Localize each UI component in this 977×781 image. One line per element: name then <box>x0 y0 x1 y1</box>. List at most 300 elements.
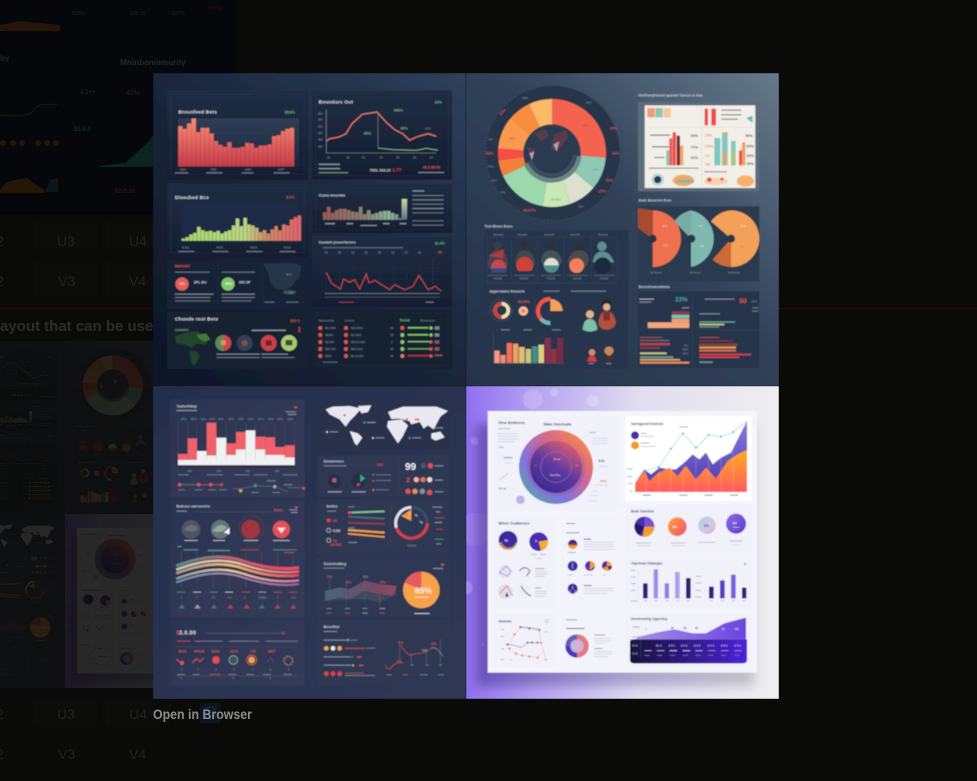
panel: lines and donut: % <box>415 514 419 518</box>
panel: wave chart: 0.0 <box>292 595 296 599</box>
panel: concentric chart: Scheling <box>504 458 513 460</box>
panel: map and circles: $00 0 <box>290 319 299 323</box>
panel: red line chart: 00 <box>418 250 422 254</box>
panel: three pies: 00 Hours <box>650 270 662 274</box>
dimmed background: upper dashboards: $99% <box>208 6 221 12</box>
ring chart: 15% <box>499 108 507 116</box>
panel: bar chart red: 1987 <box>278 168 285 172</box>
dimmed background: table rows bottom <box>0 700 170 762</box>
panel: lines and donut: 0.00 <box>333 529 340 533</box>
panel: map and circles <box>167 312 308 369</box>
panel: purple area: Deerlinoding Ogorning <box>631 617 667 621</box>
panel: benefits <box>317 620 450 685</box>
panel: three pies: 00 Hours <box>689 270 701 274</box>
panel: four circles: 48% <box>672 526 678 529</box>
ring chart: 18% <box>586 101 592 105</box>
panel: score tiles: 2 <box>406 477 410 484</box>
panel: communication bars: 00% <box>683 347 689 351</box>
panel: concentric chart: $.fs <box>599 459 605 463</box>
panel: light report: 30% <box>691 134 699 138</box>
panel: people and small charts: FOUR <box>547 277 555 281</box>
panel: green red bars: $ 621 <box>284 245 292 249</box>
panel: legend table: $5.10.000 <box>351 354 364 358</box>
panel: line chart: Boundars Out <box>319 99 353 105</box>
panel: line chart: 1.77 <box>392 168 402 173</box>
dimmed background: table rows top: V4 <box>129 273 146 289</box>
panel: lines and donut: 00 <box>333 519 337 523</box>
panel: people and small charts: Amount <box>518 232 528 236</box>
panel: bar chart red: 1985 <box>210 168 217 172</box>
panel: red line chart: 11.4% <box>435 242 446 246</box>
panel: legend icons <box>560 517 619 608</box>
ring chart: 23% <box>610 127 618 131</box>
panel: three pies <box>638 199 759 281</box>
panel: line chart: 40% <box>400 127 408 131</box>
panel: light report: C5% <box>705 145 714 149</box>
quadrant: slate dashboard <box>153 386 466 699</box>
panel: three pies: 40% <box>662 224 668 228</box>
panel: green red bars: $ 821 <box>216 245 224 249</box>
panel: three pies: 0% <box>699 224 703 228</box>
ring chart: 83% <box>486 151 494 155</box>
panel: communication bars: 00% <box>683 351 689 355</box>
panel: line chart: 00 <box>396 155 400 159</box>
panel: lines and donut: 000000 <box>407 543 417 547</box>
panel: line chart: 00 <box>380 155 383 159</box>
panel: stacked bars: 00% <box>191 417 197 421</box>
panel: score tiles: 99 <box>405 462 417 473</box>
panel: communication bars: 0% <box>684 344 689 348</box>
panel: legend table <box>312 310 452 369</box>
panel: legend table: Trend <box>400 318 410 322</box>
panel: network chart: Gadosts <box>498 620 512 624</box>
ring chart: 0% <box>489 137 493 141</box>
panel: world map <box>317 399 450 449</box>
dimmed heading: ayout that can be used <box>0 318 163 335</box>
panel: purple area: £1.1 <box>656 644 662 648</box>
panel: stacked bars: 00% <box>258 417 264 421</box>
panel: legend table: $00,1500 <box>351 326 363 330</box>
quadrant: dark red and green dashboard <box>153 73 466 386</box>
panel: benefits: 00 <box>410 663 414 667</box>
panel: wave and pie: 0% <box>380 580 386 584</box>
panel: benefits: Beneffon <box>324 625 340 629</box>
panel: wave and pie: Seandvalling <box>324 562 346 566</box>
ring chart: 80% <box>523 96 529 100</box>
panel: line chart: 000 <box>318 131 323 135</box>
panel: stacked bars: 00% <box>201 417 207 421</box>
ring chart: 88.07% <box>523 209 536 213</box>
panel: benefits: 7% <box>398 641 404 645</box>
panel: status circles and map: 0% <box>180 282 186 286</box>
panel: light report: GolOverjhound quantel Sonon & Abs <box>638 93 703 97</box>
panel: area chart: Springnost Eraricies <box>631 422 664 426</box>
panel: stacked bars: 00% <box>181 417 187 421</box>
panel: wave and pie: 0% <box>346 580 352 584</box>
panel: stacked bars: 000 <box>275 469 280 473</box>
panel: wave chart: 0.0 <box>228 595 232 599</box>
panel: legend table: 0 <box>391 340 393 344</box>
panel: purple area: 00 <box>671 628 674 630</box>
panel: donut summary <box>560 614 619 667</box>
panel: line chart <box>312 90 452 180</box>
panel: concentric chart: Serval <box>553 458 560 461</box>
panel: purple area: £ 5 1 <box>734 644 741 648</box>
panel: people and small charts: Amount <box>493 232 503 236</box>
dimmed thumbnails <box>0 341 239 688</box>
panel: line chart: 00 <box>430 155 433 159</box>
panel: red line chart: 00 <box>365 250 368 254</box>
card shadow <box>476 424 754 686</box>
panel: status circles and map <box>167 261 308 309</box>
dimmed background: upper dashboards: $30.75 <box>130 11 146 17</box>
panel: line chart: 00 <box>346 155 350 159</box>
panel: concentric chart: Data <box>499 446 504 449</box>
panel: legend table: 00 <box>390 333 394 337</box>
quadrant: orange ring dashboard <box>466 73 779 386</box>
panel: stacked bars: 000 <box>216 469 221 473</box>
panel: stacked bars: 00% <box>238 417 244 421</box>
panel: lines and donut: 30 <box>333 539 337 543</box>
dimmed background: upper dashboards: $27% <box>172 11 185 17</box>
panel: lines and donut: % <box>405 513 408 517</box>
dimmed background: upper dashboards: 40% <box>126 90 141 97</box>
panel: people and small charts: FOUR <box>520 277 528 281</box>
ring chart: 16.03% <box>551 197 561 201</box>
panel: purple area: £ 3 1 <box>708 644 715 648</box>
panel: value row: 0 <box>252 668 254 672</box>
panel: wave chart: TIS% <box>274 509 283 513</box>
panel: people and small charts: Amount <box>544 232 554 236</box>
panel: people and small charts: FOUR <box>494 277 502 281</box>
panel: score tiles <box>317 455 450 497</box>
panel: wave chart <box>170 500 305 618</box>
panel: stacked bars: 00% <box>210 417 216 421</box>
panel: value row: 7 <box>197 668 199 672</box>
panel: stacked bars: 00% <box>248 417 254 421</box>
panel: people and small charts: 46.05% <box>518 300 531 304</box>
dimmed background: table rows top: U3 <box>57 233 75 249</box>
panel: light report <box>638 93 759 191</box>
panel: line chart: 40% <box>425 127 431 131</box>
panel: people and small charts: FOUR <box>573 277 581 281</box>
panel: purple area: £ 8 1 <box>669 644 676 648</box>
panel: people and small charts: Apperxates Gossets <box>489 289 525 293</box>
ring chart: 34% <box>612 151 620 155</box>
dimmed background: upper dashboards: Mninbeniomurity <box>120 58 186 67</box>
dimmed background: table rows top <box>0 222 170 296</box>
panel: purple area: 00 <box>695 628 699 630</box>
panel: stacked bars: 000 <box>245 469 250 473</box>
panel: purple area: 000 <box>735 629 739 631</box>
panel: four circles <box>625 507 752 553</box>
panel: light report: 30% <box>691 156 699 160</box>
panel: legend table: $0000 <box>325 333 334 337</box>
panel: purple area: 00 <box>722 629 725 631</box>
panel: legend table: $0.1600 <box>325 326 336 330</box>
panel: light report: 00% <box>747 154 755 158</box>
panel: map and circles: Chunde rost Bets <box>175 317 219 323</box>
ring chart: 27% <box>599 189 607 193</box>
panel: purple area: 00 <box>684 628 687 630</box>
panel: benefits: %0 <box>422 648 427 652</box>
panel: value row: 3827 <box>268 650 276 654</box>
panel: purple area: 00 00 <box>632 653 639 655</box>
panel: red line chart <box>312 236 452 307</box>
panel: value row: 0 <box>215 668 217 672</box>
panel: benefits: 0% <box>431 642 437 646</box>
dimmed background: table rows bottom: U3 <box>57 706 75 722</box>
panel: wave chart: 0.0 <box>211 595 216 599</box>
panel: value row: 3020 <box>230 650 238 654</box>
panel: status circles and map: $0.0 <box>286 273 292 277</box>
panel: value row: GPUS <box>194 650 205 654</box>
dimmed background: upper dashboards <box>0 0 237 215</box>
panel: three pies: 8% <box>740 245 745 249</box>
panel: wave and pie <box>317 558 450 618</box>
panel: status circles and map: REPORT <box>175 265 191 269</box>
panel: concentric chart: Data Notes <box>499 428 511 431</box>
panel: three pies: 4% <box>700 244 705 248</box>
panel: legend table: 00 <box>390 354 394 358</box>
panel: line chart: 00 <box>413 155 417 159</box>
dimmed background: table rows top: V3 <box>58 273 75 289</box>
dimmed red divider <box>0 308 977 309</box>
ring chart: 42% <box>509 137 515 141</box>
panel: legend table: $500.0.000 <box>351 340 366 344</box>
panel: legend table: 00 <box>390 326 394 330</box>
panel: status circles and map: 1PL 60r <box>194 281 207 285</box>
panel: legend table: $500,000 <box>351 347 363 351</box>
panel: red line chart: 00 <box>378 250 382 254</box>
ring chart: 37% <box>500 191 506 195</box>
panel: status circles and map: 890.0F <box>239 281 251 285</box>
panel: value row: 0 <box>270 668 272 672</box>
panel: line chart: 000 <box>318 138 323 142</box>
panel: purple area <box>625 614 752 667</box>
panel: lines and donut: 00 000 <box>330 543 342 547</box>
panel: people and small charts <box>484 225 628 369</box>
panel: status donuts: 8. <box>535 541 538 543</box>
panel: value row <box>170 620 305 686</box>
panel: three pies: 15% <box>663 243 669 247</box>
panel: wave and pie: 0% <box>363 575 369 579</box>
open in browser label: Open in Browser <box>153 706 252 722</box>
dimmed background: table rows bottom: V3 <box>58 746 75 762</box>
panel: bar chart red <box>167 90 308 180</box>
panel: wave and pie: 85% <box>415 585 432 595</box>
panel: line chart: 10% <box>435 100 443 104</box>
panel: communication bars: 32% <box>751 299 757 303</box>
panel: communication bars <box>638 285 759 368</box>
panel: concentric chart: Water Distribuata <box>544 422 571 426</box>
panel: line chart: 000 <box>318 144 323 148</box>
panel: stacked bars: Toaheifitiop <box>176 404 198 408</box>
panel: legend table: 00 <box>390 347 394 351</box>
panel: purple area: O <box>645 629 647 631</box>
panel: light report: 60% <box>747 145 755 149</box>
panel: wave chart: Botnser oarnorchle <box>176 505 210 509</box>
icon: loading spinner <box>200 703 220 723</box>
panel: legend table: Marketshare <box>319 318 335 322</box>
panel: purple area: £ 0 1 <box>694 644 701 648</box>
panel: stacked bars: 00% <box>268 417 274 421</box>
panel: communication bars: 33% <box>675 297 688 304</box>
panel: line chart: TWIL 863.20 <box>370 169 391 173</box>
panel: lines and donut: Suhhs <box>326 505 338 509</box>
dimmed background: table rows bottom: U4 <box>129 706 147 722</box>
panel: three pies: 00 Hours <box>728 270 740 274</box>
panel: red line chart: 00 <box>351 250 355 254</box>
panel: stacked bars: 00% <box>287 417 293 421</box>
panel: light report: 71% <box>691 145 699 149</box>
panel: green red bars: $ 0% <box>286 195 295 199</box>
panel: three pies: Zade Boxeren Eres <box>638 199 671 203</box>
panel: grouped bars: Jojorhost Oadurges <box>631 562 663 566</box>
panel: line chart: 100% <box>394 109 404 113</box>
panel: line chart: 00 <box>327 155 331 159</box>
panel: concentric chart: Data Rate <box>550 474 561 477</box>
dimmed background: upper dashboards: 4.2++ <box>80 90 96 96</box>
panel: line chart: 000 <box>318 118 323 122</box>
panel: legend table: $0,000 <box>325 340 334 344</box>
panel: small bars and legend <box>312 184 452 233</box>
panel: value row: 702 <box>250 650 256 654</box>
dimmed background: upper dashboards: $17% <box>72 11 85 17</box>
panel: red line chart: 00 <box>325 250 328 254</box>
panel: legend table: $000 <box>325 354 332 358</box>
panel: value row: 0 <box>181 668 183 672</box>
ring chart: 20% <box>491 178 497 182</box>
panel: purple area: £ 0 1 <box>681 644 688 648</box>
panel: concentric chart <box>493 416 619 510</box>
panel: benefits: 00 <box>439 663 443 667</box>
panel: stacked bars: 000 <box>187 469 192 473</box>
panel: small bars and legend: Ouras arsonias <box>319 194 345 198</box>
ring chart: 28% <box>583 123 589 127</box>
panel: green red bars <box>167 184 308 258</box>
ring chart: 37% <box>488 165 494 169</box>
panel: score tiles: 000 <box>377 463 383 467</box>
panel: communication bars: 50 <box>739 298 747 305</box>
panel: people and small charts: Tish Bince Eoes <box>484 225 513 229</box>
panel: red line chart: 00 <box>338 250 342 254</box>
panel: line chart: 000 <box>318 124 323 128</box>
dimmed background: table rows top: U4 <box>129 233 147 249</box>
panel: wave chart: 0 <box>244 595 246 599</box>
panel: wave chart: 00000 <box>258 595 267 599</box>
panel: line chart: 86.9 85.00 <box>423 166 440 170</box>
panel: value row: 3019 <box>178 650 186 654</box>
panel: red line chart: Ouwant yeuoertenies <box>319 241 356 245</box>
panel: status donuts <box>493 517 554 608</box>
panel: light report: 15% <box>705 133 713 137</box>
panel: legend table: Movements <box>420 318 436 322</box>
panel: bar chart red: 1986 <box>245 168 251 172</box>
panel: people and small charts: FOUR <box>600 277 608 281</box>
panel: four circles: $19 <box>733 523 737 525</box>
panel: benefits: 00 <box>425 663 429 667</box>
panel: lines and donut: % <box>420 520 424 524</box>
panel: four circles: Bede Oueriton <box>631 509 654 513</box>
panel: green red bars: $ 821 <box>250 245 258 249</box>
panel: benefits: 1% <box>396 660 402 664</box>
quadrant: light purple dashboard <box>459 386 779 699</box>
panel: concentric chart: Plese Beitidcons <box>498 421 525 425</box>
panel: lines and donut <box>317 499 450 554</box>
panel: light report: 15/ <box>705 162 710 166</box>
panel: light report: C3 <box>705 154 710 158</box>
panel: concentric chart: Del ing <box>499 488 507 490</box>
ring chart: 33% <box>578 205 584 209</box>
panel: light report: 50% <box>747 162 755 166</box>
panel: status circles and map: 40% <box>225 282 233 286</box>
panel: wave chart: 7/ <box>196 595 198 599</box>
panel: wave chart: 7 <box>277 595 279 599</box>
panel: value row: 0 <box>288 668 290 672</box>
ring chart: 17% <box>593 167 599 171</box>
panel: legend table: $00.000 <box>325 347 336 351</box>
card <box>488 411 757 673</box>
panel: red line chart: 00 <box>405 250 408 254</box>
panel: legend table: $0,0500 <box>351 333 362 337</box>
panel: red line chart: 00 <box>391 250 395 254</box>
panel: value row: 8010 <box>212 650 220 654</box>
panel: score tiles: Swoloresce <box>324 460 344 464</box>
panel: network chart <box>493 614 554 667</box>
panel: bar chart red: Brounfeed Bets <box>178 109 217 115</box>
panel: light report: 50% <box>745 134 753 138</box>
panel: grouped bars <box>625 559 752 608</box>
panel: green red bars: $ 921 <box>182 245 190 249</box>
panel: red line chart: 00 <box>438 250 442 254</box>
panel: value row: 0 <box>233 668 235 672</box>
panel: legend table: Current <box>345 318 354 322</box>
panel: line chart: 00 <box>362 155 365 159</box>
dimmed background: table rows bottom: V4 <box>129 746 146 762</box>
panel: stacked bars: 00% <box>228 417 234 421</box>
panel: stacked bars: 00% <box>277 417 283 421</box>
panel: line chart: 000 <box>318 112 323 116</box>
dimmed background: upper dashboards: by <box>0 54 10 63</box>
panel: people and small charts: Amount <box>570 232 580 236</box>
panel: line chart: 40% <box>364 131 372 135</box>
panel: purple area: £ 8 1 <box>721 644 728 648</box>
panel: people and small charts: Amount <box>598 232 608 236</box>
panel: stacked bars <box>170 399 305 498</box>
panel: status donuts: Bfficer Oualtarnoes <box>499 522 530 526</box>
panel: purple area: 00 00 <box>632 646 639 648</box>
panel: bar chart red: $5.6% <box>285 110 296 114</box>
panel: concentric chart: 60 <box>575 465 579 467</box>
panel: area chart <box>625 416 752 501</box>
panel: wave chart: 7 <box>181 595 183 599</box>
panel: status circles and map: 0.0 <box>289 291 293 295</box>
panel: four circles: 8% <box>704 524 709 528</box>
panel: value row: $3.0.00 <box>176 630 196 636</box>
panel: stacked bars: 00% <box>218 417 224 421</box>
panel: purple area: 000 <box>709 628 714 630</box>
panel: status donuts: 8% <box>505 541 509 543</box>
ring chart: 23% <box>606 179 614 183</box>
panel: concentric chart: 20 <box>534 465 538 467</box>
dimmed background: upper dashboards: $5.8.0 <box>74 127 91 133</box>
panel: wave and pie: 0% <box>327 575 333 579</box>
dimmed background: upper dashboards: $2.0.20 <box>115 189 136 195</box>
panel: bar chart red: 1984 <box>180 168 186 172</box>
ring chart <box>485 85 620 221</box>
panel: communication bars: Sovoxinuncations <box>638 285 670 289</box>
